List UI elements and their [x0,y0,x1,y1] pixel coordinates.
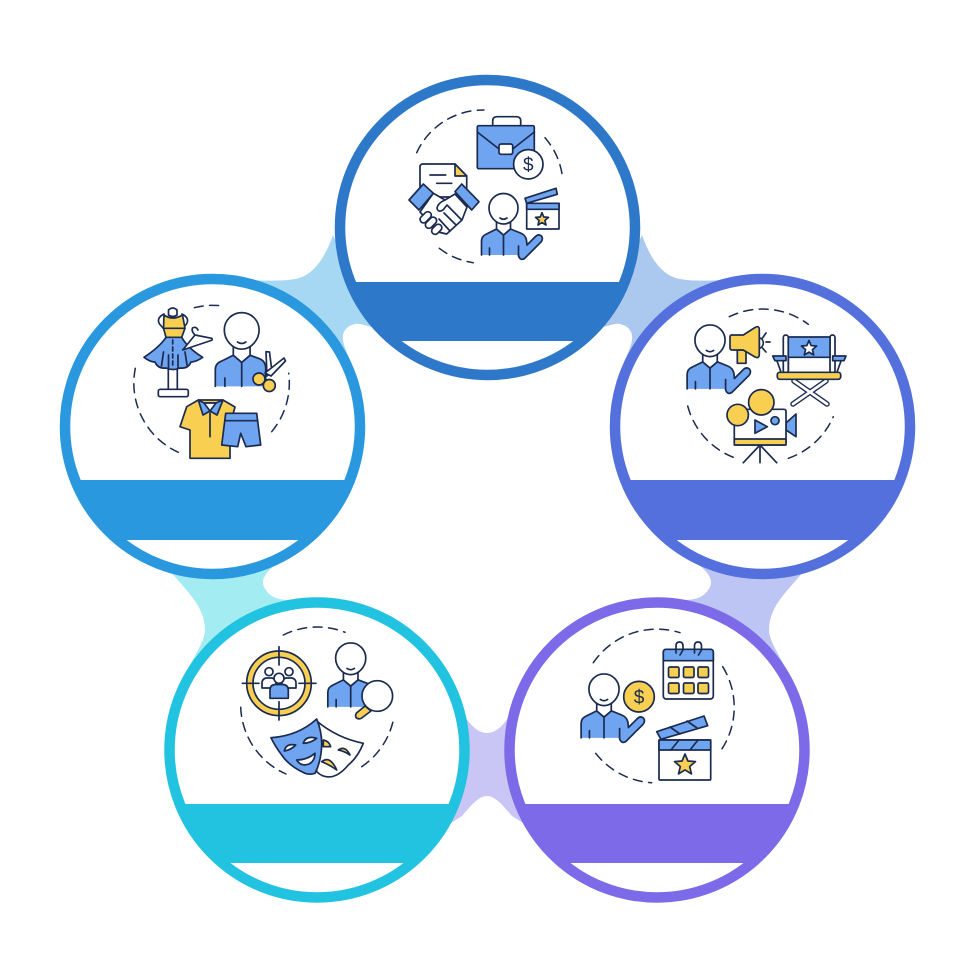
panel: deals and contracts [330,80,646,375]
title band [80,480,344,540]
dashed orbit [241,627,394,774]
panel: costume design [55,279,371,574]
circle ring [65,279,360,574]
icon: director person [687,325,750,393]
circle ring [170,602,464,898]
title band [630,480,894,540]
title band [356,282,619,341]
icon: person [482,194,542,259]
icon: film clapperboard [657,716,711,780]
connector: top to left [250,235,376,362]
icon: director chair [773,335,846,404]
connector: top to right [599,235,725,362]
icon: contract handshake [409,164,479,236]
dashed orbit [688,309,833,458]
icon: briefcase with dollar: $ [523,155,534,176]
connector: right to bottom right [654,565,809,665]
icon: dress on mannequin [144,308,212,397]
icon: briefcase with dollar [477,117,543,179]
icon: producer person [581,674,644,742]
dashed orbit [593,629,734,783]
dashed orbit [134,305,289,452]
icon: audience target [242,647,316,720]
icon: magnifying glass [356,681,393,719]
icon: shirt and shorts [180,400,261,458]
icon: dollar coin: $ [634,688,645,708]
dashed orbit [417,110,563,263]
icon: megaphone [730,327,770,363]
icon: theatre masks [271,719,363,777]
icon: dollar coin [624,681,654,712]
icon: calendar [663,642,713,699]
icon: tailor person [215,313,266,386]
icon: researcher person [328,643,372,707]
connector: left to bottom left [165,565,320,665]
panel: scheduling and budget [500,602,816,898]
connector: bottom left to bottom right [440,680,534,830]
icon: scissors [253,352,286,392]
title band [186,804,448,863]
icon: clapperboard [525,188,559,229]
circle ring [510,602,804,898]
circle ring [340,80,635,375]
panel: directing [605,279,921,574]
circle ring [615,279,910,574]
title band [526,804,788,863]
icon: film camera on tripod [727,390,796,463]
panel: audience and genre research [160,602,476,898]
